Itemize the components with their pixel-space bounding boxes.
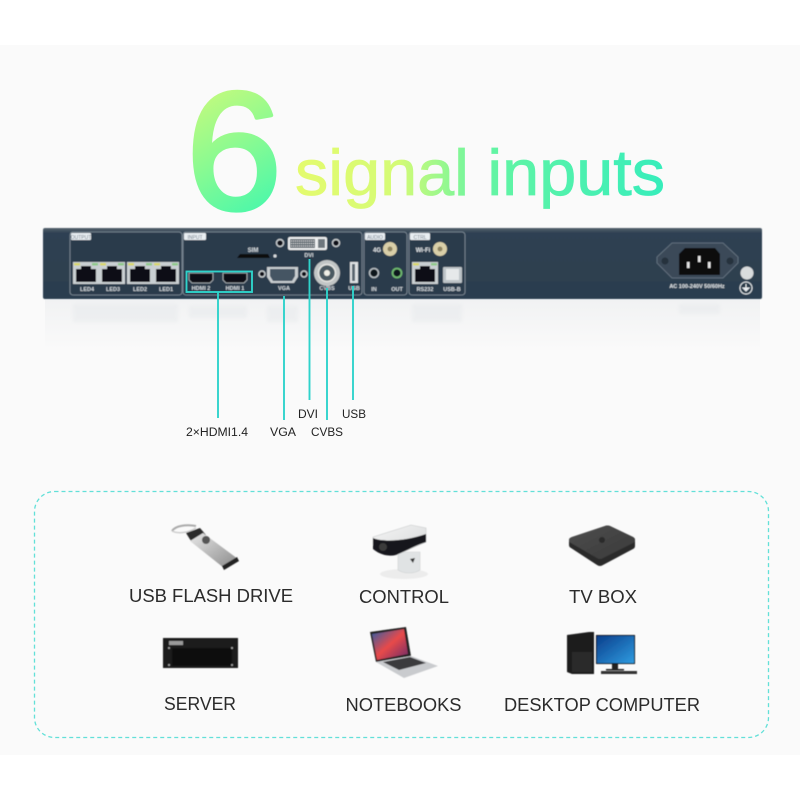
SIM slot: SIM (248, 248, 258, 254)
panel: control: Wi-Fi (416, 248, 431, 254)
VGA port: VGA (278, 286, 290, 292)
icon: TV box (569, 526, 635, 566)
device rear panel (43, 228, 762, 299)
USB port: USB (348, 286, 360, 292)
label: TV box: TV BOX (569, 587, 637, 607)
CVBS connector (326, 288, 328, 420)
device reflection (45, 300, 760, 350)
DVI connector (308, 259, 310, 400)
label: notebooks: NOTEBOOKS (346, 695, 462, 715)
label: server: SERVER (164, 694, 236, 714)
panel: output ports (70, 232, 182, 295)
label: VGA: VGA (270, 427, 296, 439)
callout lines: teal connectors (186, 259, 353, 420)
title numeral 6: 6 (186, 57, 282, 245)
label: control: CONTROL (359, 587, 449, 607)
USB port (348, 262, 360, 292)
HDMI highlight box (186, 272, 252, 292)
DVI port (276, 237, 340, 259)
CVBS port (314, 260, 340, 292)
power inlet: AC 100-240V 50/60Hz (669, 284, 725, 290)
icon: surveillance camera (373, 525, 428, 579)
title words: signal inputs (295, 136, 665, 209)
HDMI ports (189, 273, 247, 292)
icon: desktop computer (567, 632, 637, 674)
ground screw and symbol (740, 266, 754, 294)
label: desktop computer: DESKTOP COMPUTER (504, 695, 700, 715)
label: USB: USB (342, 409, 366, 421)
power inlet (657, 243, 738, 290)
SIM slot (237, 248, 277, 258)
panel: control (409, 232, 465, 295)
port labels (186, 409, 366, 439)
USB connector (352, 286, 354, 400)
VGA connector (283, 296, 285, 420)
icon: USB flash drive (172, 525, 239, 570)
panel: control: USB-B (443, 287, 461, 293)
icon: server (163, 638, 238, 668)
HDMI ports: HDMI 1 (226, 286, 244, 292)
panel: output ports: LED1 (159, 287, 173, 293)
panel: control: RS232 (417, 287, 433, 293)
panel: audio (364, 232, 407, 295)
panel: output ports: OUTPUT (71, 235, 91, 241)
panel: audio: AUDIO (367, 235, 383, 241)
label: DVI: DVI (298, 409, 318, 421)
panel: audio: OUT (391, 287, 403, 293)
label: USB flash drive: USB FLASH DRIVE (129, 586, 293, 606)
panel: output ports: LED4 (80, 287, 95, 293)
panel: audio: 4G (373, 248, 381, 254)
CVBS port: CVBS (319, 286, 335, 292)
panel: audio: IN (371, 287, 377, 293)
label: CVBS: CVBS (311, 427, 343, 439)
panel: input ports: INPUT (188, 235, 202, 241)
panel: input ports (183, 232, 362, 295)
HDMI ports: HDMI 2 (192, 286, 210, 292)
title (186, 57, 665, 245)
panel: output ports: LED2 (133, 287, 147, 293)
panel: output ports: LED3 (106, 287, 120, 293)
label: HDMI: 2×HDMI1.4 (186, 427, 249, 439)
icon: notebook (370, 627, 438, 678)
DVI port: DVI (304, 253, 314, 259)
HDMI connector (217, 292, 219, 418)
panel: control: CTRL (413, 235, 427, 241)
panel: compatible sources (34, 492, 768, 738)
VGA port (259, 267, 307, 292)
